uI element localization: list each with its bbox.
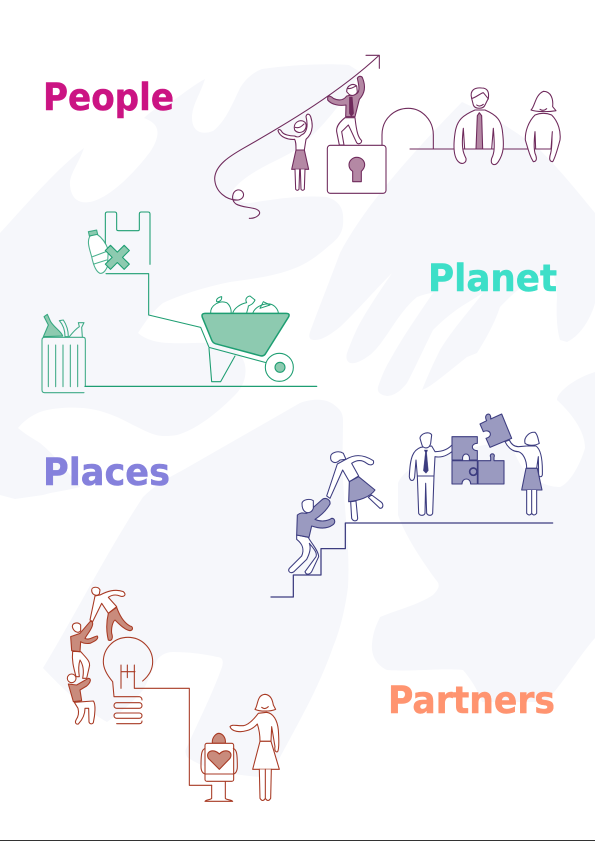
figure: man with puzzle (409, 433, 457, 515)
heading: Places: Places (43, 451, 170, 494)
icon: donation box with heart (201, 733, 237, 801)
ground line (85, 384, 317, 388)
icon: plastic bag (105, 212, 150, 264)
icon: padlock with keyhole (327, 108, 433, 193)
icon: cross mark (98, 238, 136, 276)
illustration: recycling, wheelbarrow of fruit and rubbish bin (42, 212, 317, 393)
heading: Partners: Partners (388, 679, 555, 722)
icon: fruit in wheelbarrow (211, 296, 278, 313)
icon: rubbish bin (42, 314, 85, 393)
illustration: helping hand on stairs and team building puzzle (271, 414, 553, 597)
heading: Planet: Planet (428, 257, 557, 300)
heading: People: People (43, 76, 174, 119)
icon: puzzle pieces (452, 414, 512, 484)
figure: woman placing hand on box (230, 694, 279, 800)
icon: plastic bottle (88, 230, 108, 273)
figure: woman pulling man up (327, 452, 383, 521)
figure: woman reaching up (278, 114, 312, 190)
figure: man climbing stairs (289, 499, 335, 574)
illustration: team on light bulb, donation box and woman (67, 587, 279, 801)
stairs and platform (271, 523, 553, 597)
icon: growth arrow with curly tail (215, 55, 379, 218)
illustration: people climbing growth arrow, padlock and team at table (215, 55, 560, 218)
figure: woman with puzzle (505, 432, 542, 515)
figure: woman behind table (525, 91, 560, 162)
connector line from bulb to donation box (134, 665, 212, 785)
icon: light bulb (103, 637, 153, 724)
icon: wheelbarrow (202, 313, 293, 382)
figure: top climber (90, 587, 132, 640)
connector line (106, 274, 266, 363)
figure: man in tie behind table (454, 88, 503, 165)
figure: man on padlock pushing arrow (328, 76, 365, 145)
figure: bottom climber (67, 674, 95, 724)
table line (410, 147, 552, 151)
figure: middle climber (71, 621, 98, 678)
